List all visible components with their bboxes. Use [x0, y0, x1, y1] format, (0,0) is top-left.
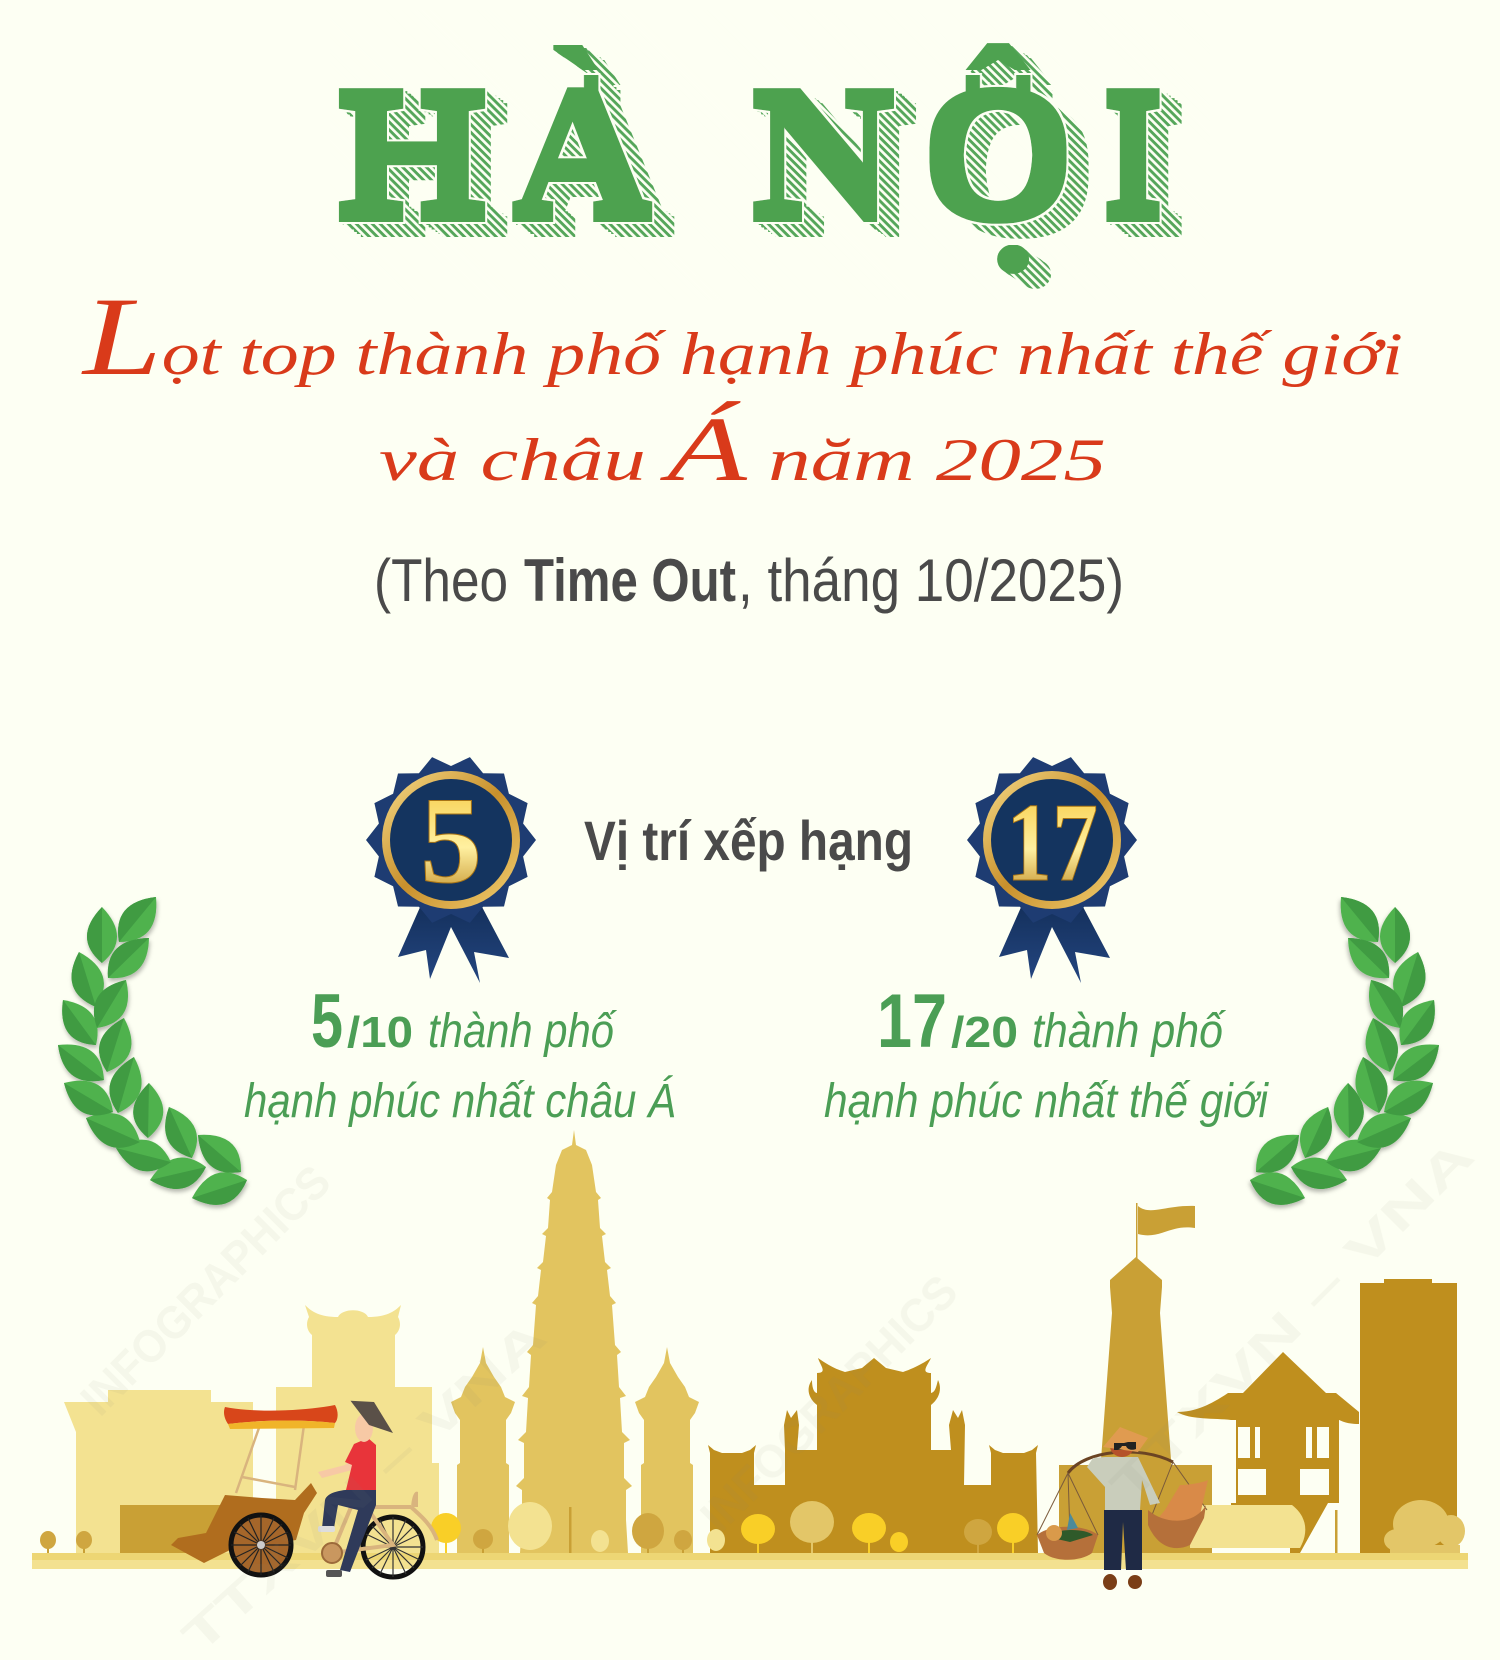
- title: HÀ NỘI: Ộ: [921, 53, 1075, 255]
- stat: 17/20 world: [824, 979, 1269, 1128]
- title: HÀ NỘI: À: [511, 40, 653, 243]
- title: HÀ NỘI: Ộ: [921, 53, 1075, 255]
- skyline: temple: [708, 1358, 1038, 1553]
- illustration: street vendor: [1037, 1427, 1208, 1590]
- skyline: pale buildings: [64, 1305, 439, 1553]
- title: HÀ NỘI: I: [1102, 53, 1164, 256]
- medal: rank 17: 17: [1006, 781, 1098, 905]
- medal: rank 5: [366, 757, 536, 983]
- watermarks: TTXVN – VNA: [1100, 1129, 1484, 1512]
- watermarks: [70, 1129, 1484, 1660]
- title: HÀ NỘI: À: [511, 52, 653, 255]
- stat: 17/20 world: 17: [877, 979, 947, 1064]
- source line: (Theo: [374, 547, 508, 614]
- title: HÀ NỘI: Ộ: [936, 75, 1090, 277]
- source line: [374, 547, 1124, 614]
- skyline: pagoda and towers: [451, 1130, 699, 1553]
- stat: 17/20 world: thành phố: [1032, 1005, 1227, 1058]
- watermarks: INFOGRAPHICS: [690, 1265, 967, 1542]
- skyline: street trees: [40, 1500, 1465, 1553]
- skyline: stilt pavilion: [1177, 1352, 1359, 1553]
- subtitle script line 1: L ọt top thành phố hạnh phúc nhất thế giới: [80, 275, 1403, 399]
- stat: 17/20 world: hạnh phúc nhất thế giới: [824, 1075, 1269, 1128]
- subtitle script line 2: và châu Á năm 2025: [379, 398, 1106, 500]
- source line: Time Out: [524, 547, 736, 614]
- laurel: right: [1250, 897, 1439, 1205]
- title: HÀ NỘI: Ộ: [921, 41, 1075, 243]
- title: HÀ NỘI: Ộ: [921, 41, 1075, 243]
- title: HÀ NỘI: I: [1102, 53, 1164, 256]
- stat: 5/10 asia: hạnh phúc nhất châu Á: [244, 1075, 676, 1128]
- watermarks: TTXVN – VNA: [172, 1309, 556, 1660]
- stat: 17/20 world: /20: [951, 1008, 1018, 1057]
- title: HÀ NỘI: H: [337, 52, 487, 255]
- stat: 5/10 asia: [244, 979, 676, 1128]
- title: HÀ NỘI: [338, 43, 1182, 289]
- skyline: ground strip: [32, 1553, 1468, 1569]
- title: HÀ NỘI: À: [511, 40, 653, 243]
- source line: , tháng 10/2025): [738, 547, 1124, 614]
- illustration: cyclo rickshaw: [171, 1401, 437, 1577]
- watermarks: INFOGRAPHICS: [70, 1155, 340, 1425]
- title: HÀ NỘI: N: [750, 52, 896, 255]
- stat: 5/10 asia: 5: [311, 979, 343, 1064]
- heading: Vị trí xếp hạng: Vị trí xếp hạng: [584, 809, 913, 872]
- medal: rank 5: 5: [420, 772, 482, 909]
- title: HÀ NỘI: N: [750, 52, 896, 255]
- laurel: left: [58, 897, 247, 1205]
- skyline: flag tower: [1059, 1203, 1212, 1553]
- stat: 5/10 asia: thành phố: [428, 1005, 618, 1058]
- title: HÀ NỘI: H: [337, 52, 487, 255]
- title: HÀ NỘI: Ộ: [936, 75, 1090, 277]
- medal: rank 17: [967, 757, 1137, 983]
- title: HÀ NỘI: À: [511, 52, 653, 255]
- skyline: tall building: [1360, 1279, 1457, 1553]
- stat: 5/10 asia: /10: [347, 1008, 413, 1057]
